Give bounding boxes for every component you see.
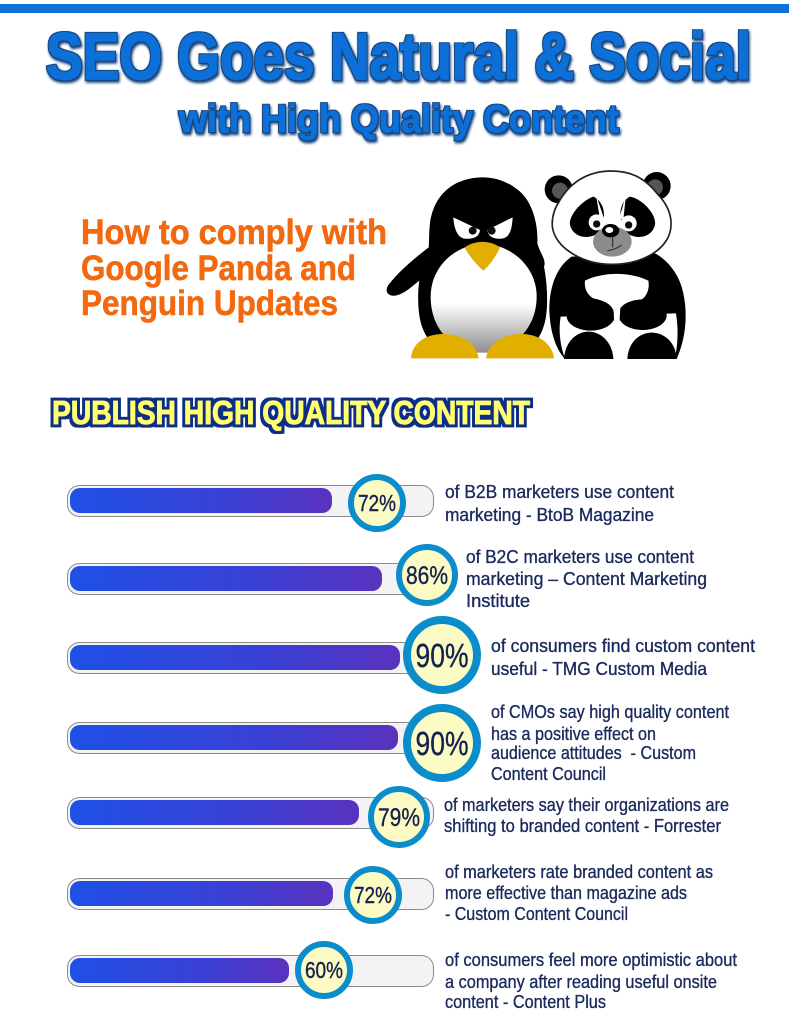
top blue bar [0,4,789,13]
stat row: 86% B2C marketers: marketing – Content Marketing [466,569,707,589]
icon: penguin [387,177,554,358]
stat row: 90% consumers: of consumers find custom content [491,636,755,656]
stat row: 86% B2C marketers: of B2C marketers use content [466,547,694,567]
stat row: 72% magazine ads: - Custom Content Council [445,904,628,924]
orange heading: How to comply with [81,213,387,252]
orange heading: Google Panda and [81,249,356,288]
stat row: 72% B2B marketers: marketing - BtoB Magazine [445,505,654,525]
stat row: 90% CMOs: has a positive effect on [491,724,656,744]
stat row: 79% marketers: 79% [378,804,420,832]
stat row: 90% consumers: 90% [416,637,468,674]
stat row: 86% B2C marketers: 86% [406,562,448,590]
illustration: penguin and panda [387,171,686,359]
stat row: 90% CMOs [68,702,729,784]
stat row: 79% marketers: shifting to branded content - Forrester [444,816,721,836]
stat row: 90% CMOs: of CMOs say high quality content [491,702,729,722]
stat row: 60% consumers: a company after reading useful onsite [445,972,717,992]
stat row: 72% magazine ads: 72% [354,882,392,908]
stat row: 72% B2B marketers: of B2B marketers use content [445,482,674,502]
stat row: 60% consumers [68,944,737,1012]
stat row: 90% CMOs: Content Council [491,764,606,784]
stat row: 72% magazine ads [68,862,713,924]
subtitle: with High Quality Content [178,98,619,141]
orange heading: Penguin Updates [81,284,338,323]
stat row: 72% B2B marketers [68,477,674,529]
stat row: 72% magazine ads: of marketers rate branded content as [445,862,713,882]
stat row: 79% marketers [68,789,729,845]
stat row: 90% consumers: useful - TMG Custom Media [491,659,708,679]
stat row: 90% consumers [68,620,755,690]
icon: panda [545,171,686,359]
stat row: 60% consumers: content - Content Plus [445,992,606,1012]
orange heading [81,213,387,323]
stat row: 86% B2C marketers: Institute [466,591,530,611]
stat row: 60% consumers: of consumers feel more optimistic about [445,950,737,970]
stat row: 72% magazine ads: more effective than magazine ads [445,883,687,903]
stat row: 86% B2C marketers [68,547,707,611]
stat row: 72% B2B marketers: 72% [358,490,396,516]
stat row: 90% CMOs: 90% [416,725,468,762]
stat row: 60% consumers: 60% [305,957,343,983]
stat row: 90% CMOs: audience attitudes - Custom [491,743,696,763]
stat row: 79% marketers: of marketers say their organizations are [444,795,729,815]
section heading: PUBLISH HIGH QUALITY CONTENT [52,394,530,431]
